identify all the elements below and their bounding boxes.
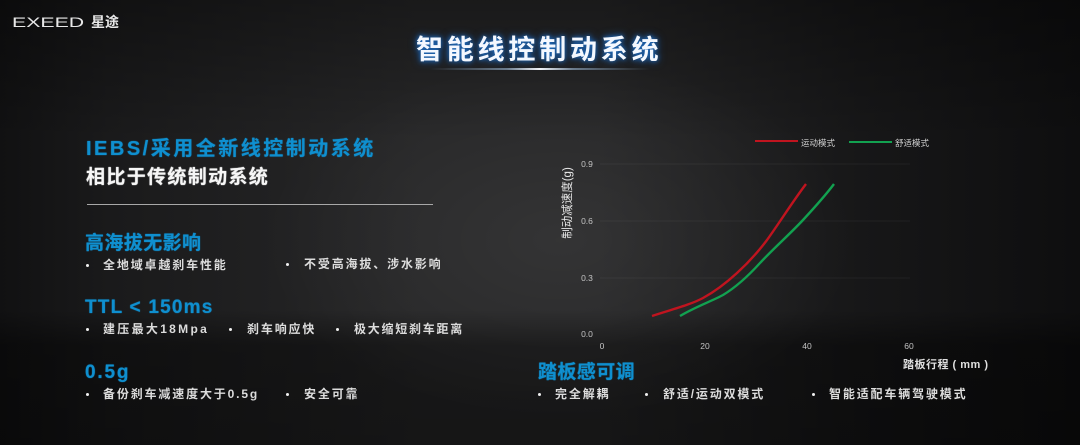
- bullet: adaptive driving mode: 智能适配车辆驾驶模式: [829, 387, 968, 401]
- line chart: [560, 138, 989, 371]
- x axis tick labels: 0: [600, 341, 605, 351]
- legend: comfort mode: [849, 138, 930, 148]
- x axis tick labels: 20: [700, 341, 710, 351]
- bullet: safe and reliable: 安全可靠: [304, 387, 359, 401]
- title: 智能线控制动系统: [416, 35, 662, 65]
- curve: comfort mode: [680, 184, 834, 316]
- bullet: fully decoupled: 完全解耦: [555, 387, 610, 401]
- y axis tick labels: 0.9: [581, 159, 593, 169]
- title underline glow: [430, 68, 650, 70]
- heading: IEBS: IEBS/采用全新线控制动系统: [86, 138, 376, 160]
- heading: adjustable pedal feel: 踏板感可调: [538, 362, 635, 383]
- logo: EXEED: EXEED: [12, 14, 84, 30]
- legend: comfort mode: 舒适模式: [895, 138, 930, 148]
- heading: high altitude: 高海拔无影响: [85, 233, 201, 254]
- y axis tick labels: 0.0: [581, 329, 593, 339]
- x axis tick labels: 60: [904, 341, 914, 351]
- logo: EXEED: 星途: [91, 14, 119, 30]
- y axis tick labels: 0.6: [581, 216, 593, 226]
- bullet: unaffected by altitude or wading: 不受高海拔、涉水影响: [304, 257, 443, 271]
- section: TTL: [84, 297, 464, 336]
- y axis tick labels: 0.3: [581, 273, 593, 283]
- section: adjustable pedal feel: [538, 361, 968, 401]
- curve: sport mode: [652, 184, 806, 316]
- bullet: pressure build: 建压最大18Mpa: [103, 322, 209, 336]
- divider line: [87, 204, 433, 205]
- bullet: fast response: 刹车响应快: [247, 322, 316, 336]
- grid lines: [600, 164, 910, 278]
- x axis tick labels: 40: [802, 341, 812, 351]
- y axis tick labels: [581, 159, 593, 339]
- bullet: backup deceleration: 备份刹车减速度大于0.5g: [103, 387, 259, 401]
- bullet: shorter distance: 极大缩短刹车距离: [354, 322, 464, 336]
- section: high altitude: [85, 232, 443, 272]
- legend: sport mode: 运动模式: [801, 138, 836, 148]
- heading: 0.5g: 0.5g: [85, 362, 130, 383]
- x axis title: 踏板行程 ( mm ): [903, 357, 989, 371]
- heading: TTL: TTL < 150ms: [85, 297, 214, 318]
- logo: EXEED: [12, 14, 119, 30]
- x axis tick labels: [600, 341, 914, 351]
- section: 0.5g: [85, 362, 359, 401]
- subheading: compared with traditional braking: 相比于传统制动系统: [86, 167, 269, 188]
- bullet: all-terrain braking: 全地域卓越刹车性能: [103, 258, 228, 272]
- legend: sport mode: [755, 138, 836, 148]
- bullet: dual mode: 舒适/运动双模式: [663, 387, 765, 401]
- y axis title: 制动减速度(g): [560, 167, 574, 239]
